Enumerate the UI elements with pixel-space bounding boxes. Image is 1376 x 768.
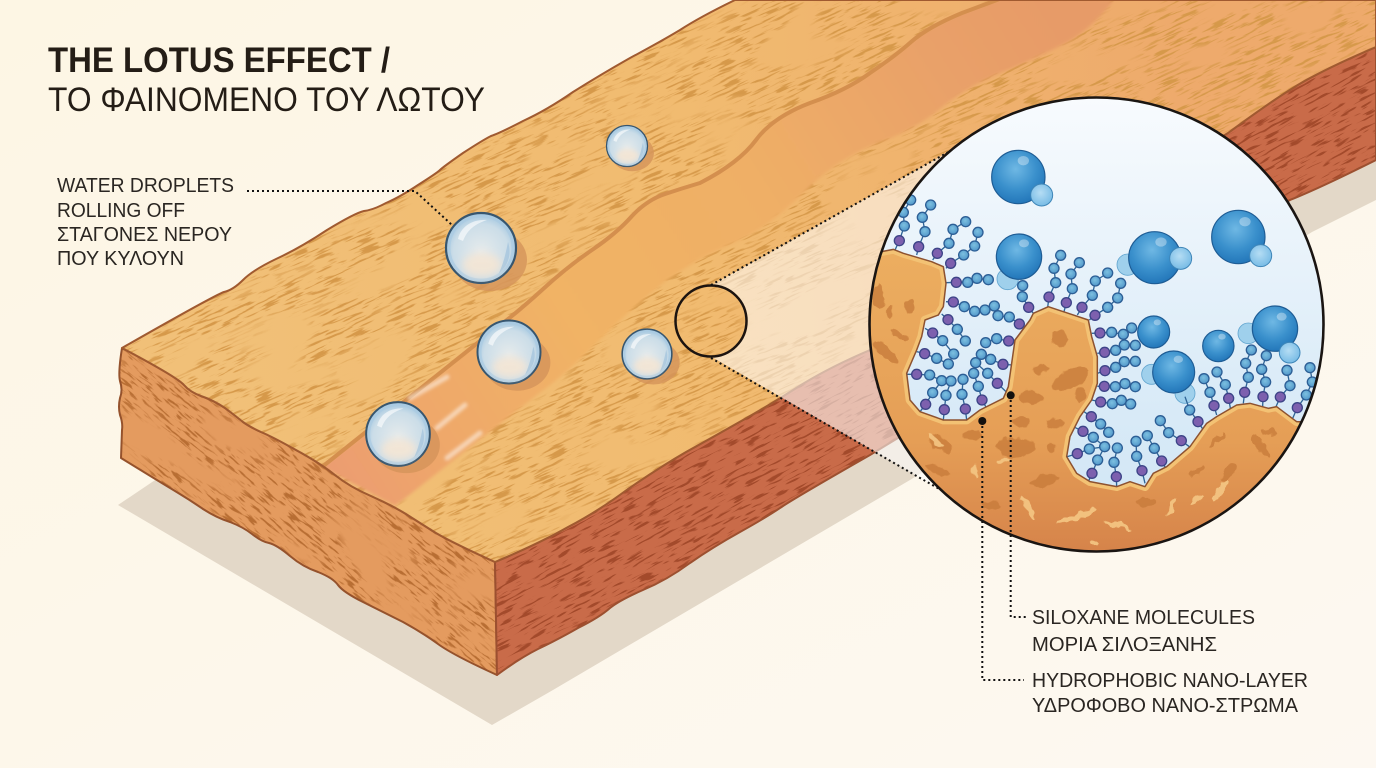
water molecules xyxy=(992,150,1300,403)
lens contents, coordinates in zoom space xyxy=(870,150,1316,550)
label: water droplets rolling off: ΣΤΑΓΟΝΕΣ ΝΕΡΟΥ xyxy=(57,224,232,246)
water droplet 1 xyxy=(606,125,654,171)
water droplet 2 xyxy=(446,213,527,291)
leader: water droplets xyxy=(247,191,452,225)
label: siloxane molecules xyxy=(1032,607,1255,656)
magnifier source circle xyxy=(676,286,746,356)
label: siloxane molecules: SILOXANE MOLECULES xyxy=(1032,607,1255,629)
hydrophobic substrate cross-section xyxy=(870,248,1300,550)
slab: textured top surface xyxy=(121,0,1376,562)
lens outline xyxy=(870,98,1324,552)
wedge dotted edge top xyxy=(711,150,952,285)
leader: hydrophobic nano-layer xyxy=(978,417,1024,680)
leader: siloxane molecules xyxy=(1007,391,1026,617)
siloxane chains: left cavity xyxy=(907,314,1017,420)
label: water droplets rolling off: WATER DROPLETS xyxy=(57,175,234,197)
siloxane chains: central pillar xyxy=(1017,250,1140,409)
wedge dotted edge bottom xyxy=(711,358,948,494)
water droplet 3 xyxy=(478,320,550,391)
slab: front left face xyxy=(118,347,498,676)
label: hydrophobic nano-layer: ΥΔΡΟΦΟΒΟ ΝΑΝΟ-ΣΤΡΩΜΑ xyxy=(1032,695,1299,717)
water droplet 5 xyxy=(622,329,680,385)
label: hydrophobic nano-layer xyxy=(1032,670,1308,717)
water droplet 4 xyxy=(366,402,440,473)
slab drop shadow xyxy=(118,100,1376,725)
title: THE LOTUS EFFECT / xyxy=(48,41,390,80)
title xyxy=(48,41,485,119)
label: siloxane molecules: ΜΟΡΙΑ ΣΙΛΟΞΑΝΗΣ xyxy=(1032,634,1217,656)
motion streaks behind droplet xyxy=(410,377,480,458)
label: hydrophobic nano-layer: HYDROPHOBIC NANO-LAYER xyxy=(1032,670,1308,692)
label: water droplets rolling off: ROLLING OFF xyxy=(57,200,185,222)
channel worn by rolling droplets xyxy=(322,0,1114,506)
magnified lens view xyxy=(860,98,1340,570)
siloxane chains: upper left xyxy=(894,195,1025,329)
siloxane chains: right cavity and ridge xyxy=(1067,345,1317,487)
label: water droplets rolling off xyxy=(57,175,234,270)
magnification wedge xyxy=(711,150,952,494)
slab: right side face xyxy=(426,38,1376,678)
label: water droplets rolling off: ΠΟΥ ΚΥΛΟΥΝ xyxy=(57,248,184,270)
title: ΤΟ ΦΑΙΝΟΜΕΝΟ ΤΟΥ ΛΩΤΟΥ xyxy=(48,81,485,119)
